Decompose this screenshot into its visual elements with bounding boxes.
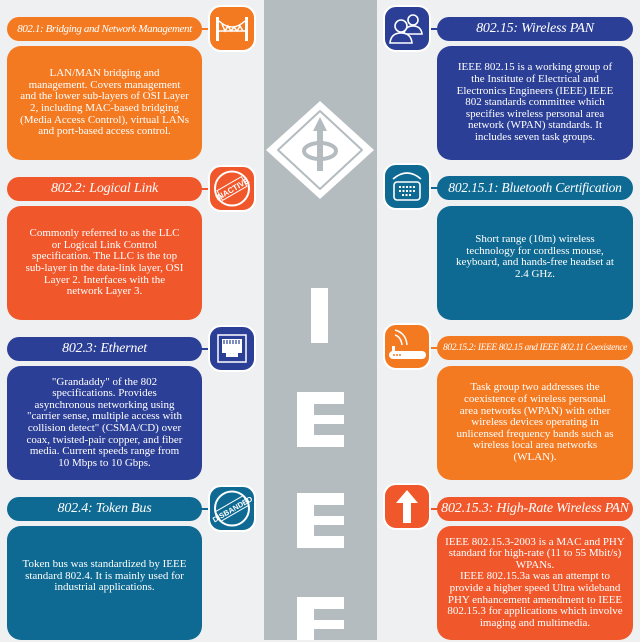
body 802.1	[7, 46, 202, 160]
panel: 802.4	[7, 485, 256, 640]
heading 802.2	[7, 177, 202, 201]
heading 802.15.3	[437, 497, 633, 521]
icon: wireless keyboard	[383, 163, 431, 210]
heading 802.1	[7, 17, 202, 41]
body 802.15: IEEE 802.15 is a working group of the Institute of Electrical and Electronics Engineers (IEEE) IEEE 802 standards committee which specifies wireless personal area network (WPAN) standards. It includes seven task groups.	[457, 61, 613, 143]
heading 802.15	[437, 17, 633, 41]
body 802.15.2: Task group two addresses the coexistence of wireless personal area networks (WPAN) with other wireless devices operating in unlicensed frequency bands such as wireless local area networks (WLAN).	[456, 381, 614, 463]
panel: 802.15.2	[383, 323, 633, 480]
letter E 1	[297, 392, 344, 447]
body 802.3	[7, 366, 202, 480]
body 802.15.3	[437, 526, 633, 640]
body 802.15.2	[437, 366, 633, 480]
icon: disbanded stamp	[208, 485, 256, 532]
body 802.15.1	[437, 206, 633, 320]
body 802.1: LAN/MAN bridging and management. Covers management and the lower sub-layers of OSI Layer 2, including MAC-based bridging (Media Access Control), virtual LANs and port-based access control.	[20, 67, 189, 137]
heading 802.3	[7, 337, 202, 361]
letter I	[311, 288, 328, 343]
icon: router	[383, 323, 431, 370]
letter E 2	[297, 493, 344, 548]
body 802.15	[437, 46, 633, 160]
heading 802.4: 802.4: Token Bus	[58, 501, 151, 516]
heading 802.15.3: 802.15.3: High-Rate Wireless PAN	[441, 501, 629, 516]
body 802.15.3: IEEE 802.15.3a was an attempt to provide a higher speed Ultra wideband PHY enhancement amendment to IEEE 802.15.3 for applications which involve imaging and multimedia.	[447, 570, 623, 629]
heading 802.15.2: 802.15.2: IEEE 802.15 and IEEE 802.11 Coexistence	[443, 343, 627, 353]
body 802.3: "Grandaddy" of the 802 specifications. Provides asynchronous networking using "carrier sense, multiple access with collision detect" (CSMA/CD) over coax, twisted-pair copper, and fiber media. Current speeds range from 10 Mbps to 10 Gbps.	[27, 376, 182, 469]
icon: users	[383, 5, 431, 52]
center band	[264, 0, 377, 640]
icon: inactive stamp: INACTIVE	[214, 176, 251, 203]
icon: ethernet port	[208, 325, 256, 372]
heading 802.4	[7, 497, 202, 521]
icon: inactive stamp	[208, 165, 256, 212]
icon: up arrow	[383, 483, 431, 530]
logo: IEEE diamond	[266, 101, 374, 199]
panel: 802.15.1	[383, 163, 633, 320]
panel: 802.3	[7, 325, 256, 480]
body 802.2: Commonly referred to as the LLC or Logical Link Control specification. The LLC is the top sub-layer in the data-link layer, OSI Layer 2. Interfaces with the network Layer 3.	[26, 227, 183, 297]
panel: 802.15	[383, 5, 633, 160]
panel: 802.15.3	[383, 483, 633, 640]
body 802.4	[7, 526, 202, 640]
heading 802.2: 802.2: Logical Link	[51, 181, 158, 196]
heading 802.1: 802.1: Bridging and Network Management	[17, 23, 192, 35]
body 802.2	[7, 206, 202, 320]
icon: disbanded stamp: DISBANDED	[211, 494, 254, 524]
heading 802.15.2	[437, 336, 633, 360]
heading 802.15.1	[437, 176, 633, 200]
heading 802.3: 802.3: Ethernet	[62, 341, 147, 356]
body 802.15.3: IEEE 802.15.3-2003 is a MAC and PHY standard for high-rate (11 to 55 Mbit/s) WPANs.	[445, 536, 625, 571]
body 802.15.1: Short range (10m) wireless technology for cordless mouse, keyboard, and hands-free headset at 2.4 GHz.	[456, 233, 614, 280]
heading 802.15.1: 802.15.1: Bluetooth Certification	[448, 180, 622, 195]
panel: 802.2	[7, 165, 256, 320]
icon: bridge	[208, 5, 256, 52]
letter E 3	[297, 597, 344, 640]
heading 802.15: 802.15: Wireless PAN	[476, 21, 594, 36]
body 802.4: Token bus was standardized by IEEE standard 802.4. It is mainly used for industrial applications.	[23, 558, 186, 593]
panel: 802.1	[7, 5, 256, 160]
